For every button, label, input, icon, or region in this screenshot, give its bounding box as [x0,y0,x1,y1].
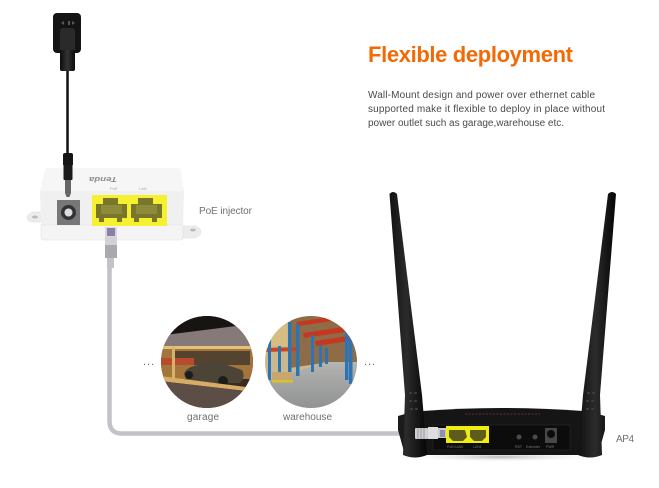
poe injector connector [105,227,117,268]
router connector [415,427,446,439]
label: garage: garage [187,412,219,423]
label: warehouse: warehouse [282,412,332,423]
photo: garage [160,315,254,409]
flanges [27,212,42,222]
description text: supported make it flexible to deploy in place without [368,104,605,115]
description text: power outlet such as garage,warehouse etc. [368,118,564,129]
power jack [545,428,557,443]
body [423,408,588,455]
description text: Wall-Mount design and power over ethernet cable [368,90,595,101]
yellow ports [446,426,489,443]
photo: warehouse [264,315,358,409]
title: Flexible deployment [368,42,574,67]
logo: Tenda [89,175,117,182]
label: PoE injector: PoE injector [199,206,253,217]
router: RST [515,445,523,449]
buttons [516,434,522,440]
ellipsis right: ... [364,356,376,368]
bottom lip [41,225,183,240]
router: PoE/LAN0 [447,445,463,449]
poe injector: PoE [110,186,118,191]
icon: power adapter [53,13,81,197]
description text [368,90,605,129]
ethernet cable [110,255,418,434]
front face [40,191,184,226]
right antenna [578,192,616,458]
left antenna [390,192,427,458]
router: Extender [526,445,541,449]
poe injector [27,168,201,240]
label: AP4: AP4 [616,434,634,445]
router: LAN1 [473,445,482,449]
DC jack [57,200,80,225]
top face [40,168,184,191]
yellow ports [92,195,167,226]
router: PWR [546,445,555,449]
router [390,192,616,462]
poe injector: LAN [139,186,147,191]
ellipsis left: ... [143,356,155,368]
